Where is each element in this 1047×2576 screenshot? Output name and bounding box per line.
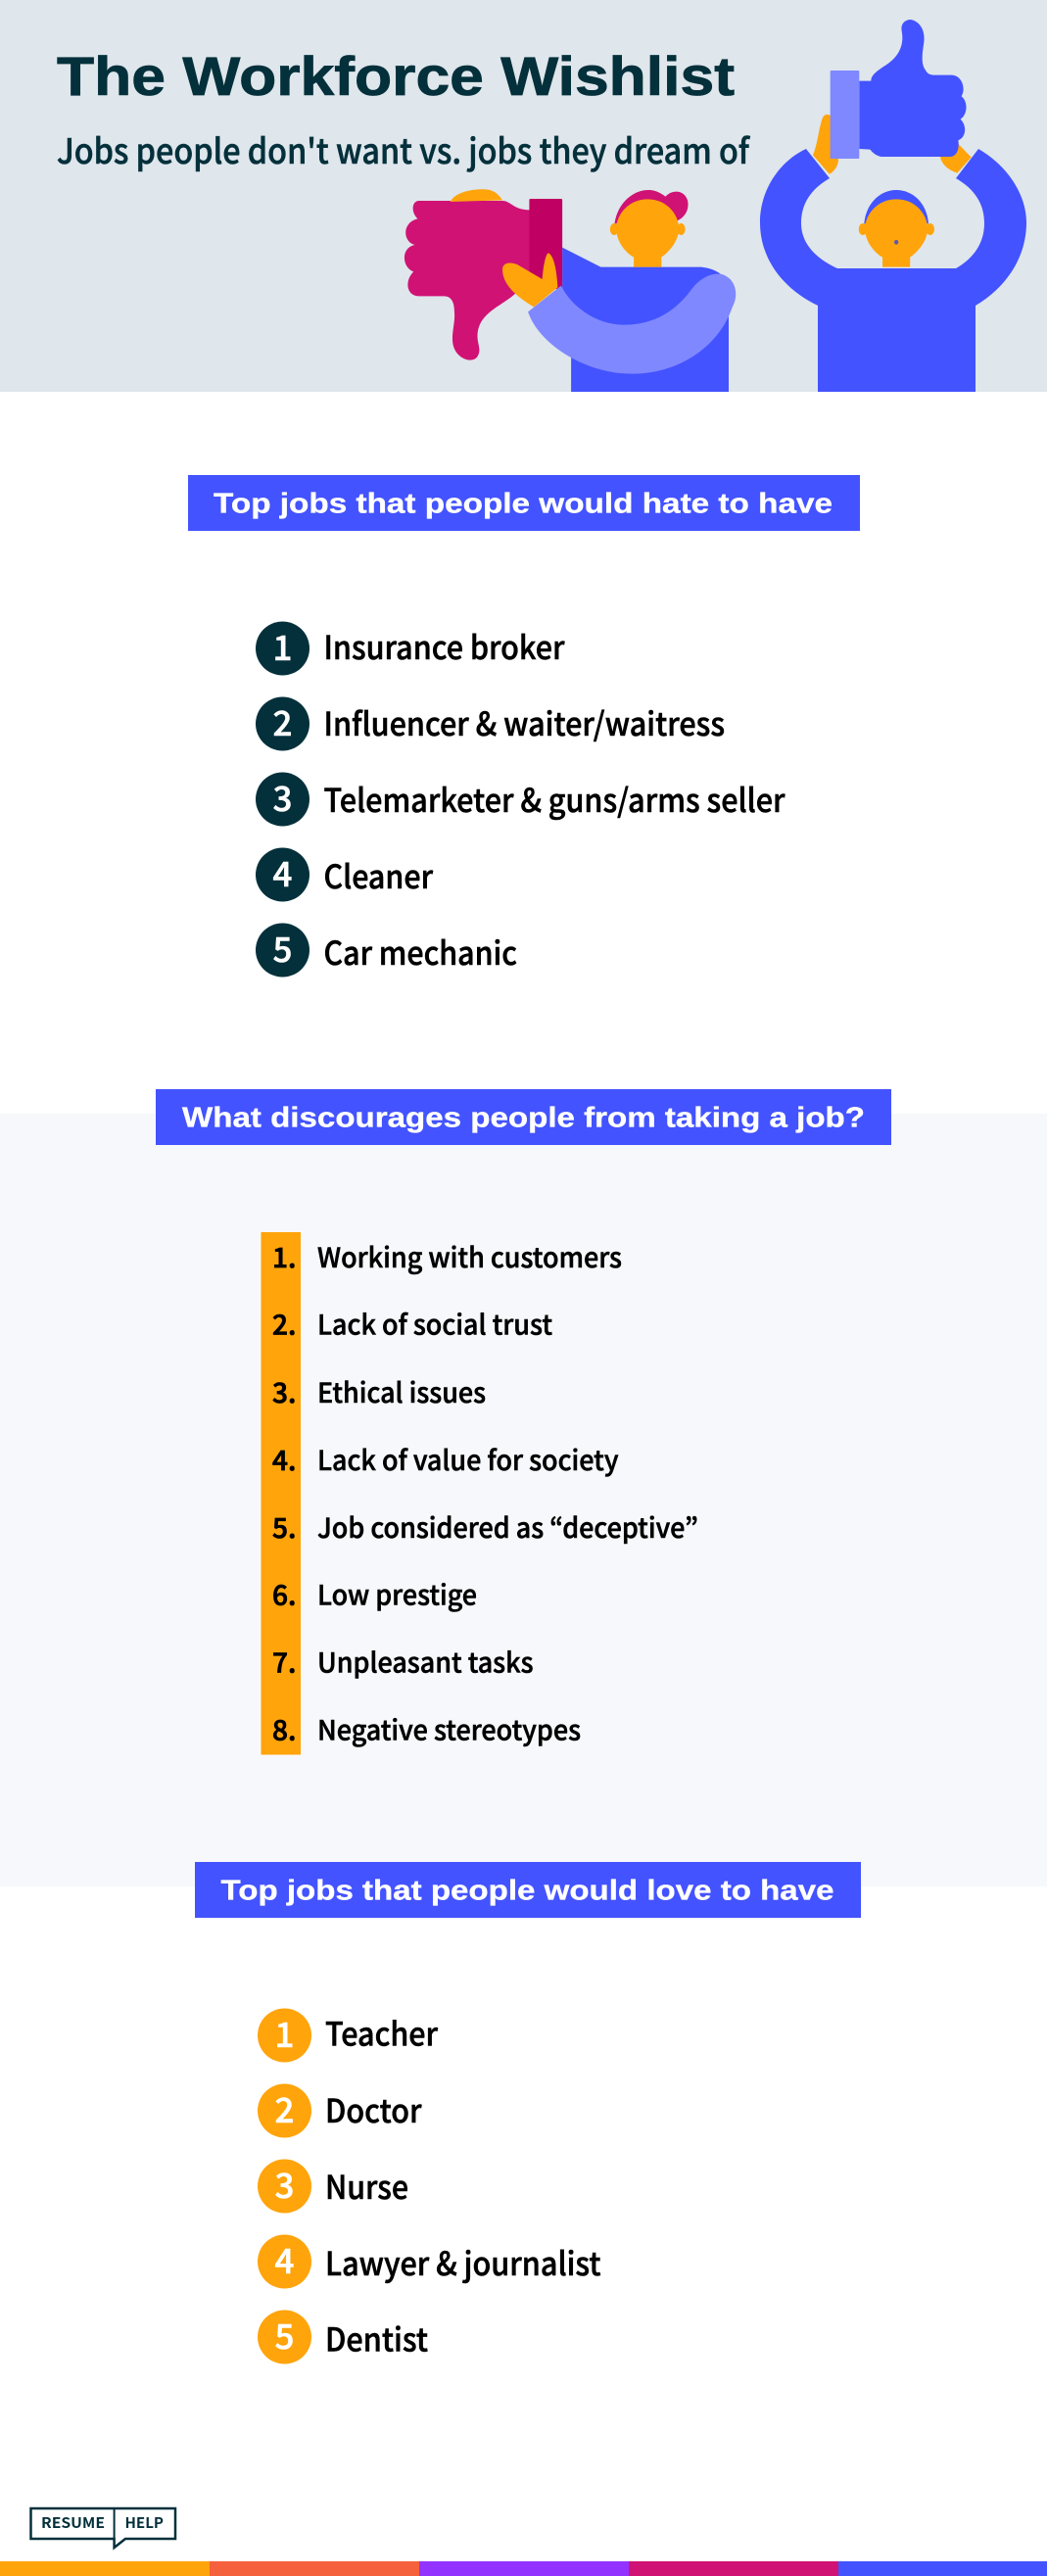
item 2 xyxy=(256,696,725,750)
item 4: 4 xyxy=(273,847,292,897)
item 3 xyxy=(258,2159,408,2214)
item 1: 1 xyxy=(273,621,292,671)
heading: discouragements: What discourages people from taking a job? xyxy=(182,1103,865,1134)
item 3: 3 xyxy=(275,2159,294,2209)
item 2: Lack of social trust xyxy=(317,1305,552,1344)
item 4: 4. xyxy=(272,1440,296,1479)
item 3: 3 xyxy=(273,772,292,822)
item 1 xyxy=(256,621,565,676)
item 4: Lack of value for society xyxy=(317,1440,619,1479)
item 5: 5 xyxy=(273,923,292,973)
logo: Resume Help: RESUME xyxy=(41,2512,105,2533)
heading: loved jobs: Top jobs that people would love to have xyxy=(221,1875,834,1906)
item 8: 8. xyxy=(272,1709,296,1748)
heading: discouragements xyxy=(156,1089,891,1145)
item 5: Dentist xyxy=(325,2314,428,2361)
hero banner xyxy=(0,0,1047,392)
item 2: 2 xyxy=(273,696,292,746)
subtitle: Jobs people don't want vs. jobs they dream of xyxy=(57,124,751,174)
item 1: 1. xyxy=(272,1237,296,1276)
item 6: Low prestige xyxy=(317,1575,477,1614)
item 3: Ethical issues xyxy=(317,1372,486,1411)
illustration: person holding thumbs up xyxy=(760,20,1026,392)
heading: hate jobs xyxy=(188,475,860,531)
item 1 xyxy=(258,2008,438,2063)
item 6: 6. xyxy=(272,1575,296,1614)
logo: Resume Help xyxy=(31,2508,175,2548)
item 2: Influencer & waiter/waitress xyxy=(323,698,725,745)
list: loved jobs xyxy=(258,2008,601,2364)
item 5: Car mechanic xyxy=(323,928,517,975)
title: The Workforce Wishlist xyxy=(57,45,735,107)
item 5: Job considered as “deceptive” xyxy=(317,1507,698,1547)
item 1: Working with customers xyxy=(317,1237,622,1276)
item 1: Teacher xyxy=(325,2009,438,2056)
item 5: 5 xyxy=(275,2310,294,2360)
orange number bar xyxy=(261,1232,301,1755)
illustration: person holding thumbs down xyxy=(405,189,736,392)
item 3: Telemarketer & guns/arms seller xyxy=(323,775,785,822)
item 3: 3. xyxy=(272,1372,296,1411)
heading: loved jobs xyxy=(195,1862,861,1918)
item 2 xyxy=(258,2083,422,2137)
item 5 xyxy=(256,923,517,978)
list: discouragements xyxy=(261,1232,698,1755)
heading: hate jobs: Top jobs that people would hate to have xyxy=(214,488,833,519)
item 4: 4 xyxy=(275,2234,294,2284)
logo: Resume Help: HELP xyxy=(125,2512,164,2533)
item 5: 5. xyxy=(272,1507,296,1547)
item 2: 2. xyxy=(272,1305,296,1344)
item 7: 7. xyxy=(272,1642,296,1681)
item 4: Cleaner xyxy=(323,851,433,898)
panel: discouragement background xyxy=(0,1114,1047,1886)
item 8: Negative stereotypes xyxy=(317,1709,581,1748)
list: hated jobs xyxy=(256,621,785,978)
item 2: Doctor xyxy=(325,2085,422,2132)
item 4: Lawyer & journalist xyxy=(325,2238,601,2285)
item 2: 2 xyxy=(275,2083,294,2133)
item 1: 1 xyxy=(275,2008,294,2058)
item 4 xyxy=(258,2234,601,2288)
item 5 xyxy=(258,2310,428,2364)
item 3: Nurse xyxy=(325,2162,408,2209)
footer colour strip xyxy=(0,2561,1047,2576)
item 4 xyxy=(256,847,433,901)
item 7: Unpleasant tasks xyxy=(317,1642,533,1681)
item 1: Insurance broker xyxy=(323,622,565,669)
